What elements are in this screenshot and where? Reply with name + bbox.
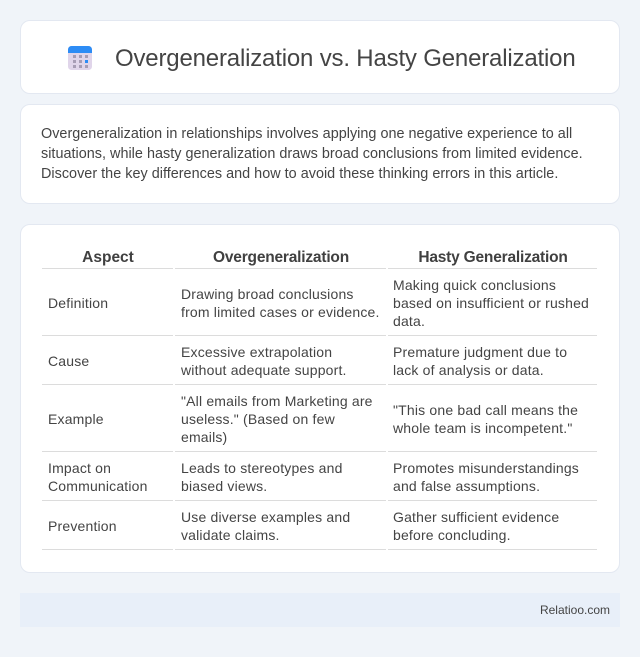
table row: Impact on Communication: and false assumptions. <box>393 478 540 494</box>
table row: Example: useless." (Based on few <box>181 411 335 427</box>
panel: comparison table card <box>20 224 620 573</box>
table row: Definition: Drawing broad conclusions <box>181 286 354 302</box>
text block: introduction: Discover the key differences and how to avoid these thinking errors in this article. <box>41 166 558 182</box>
table row: Example: emails) <box>181 429 227 445</box>
table row: Impact on Communication <box>42 460 597 501</box>
table row: Cause: Cause <box>48 353 89 369</box>
table header row <box>42 249 597 269</box>
table row: Prevention: before concluding. <box>393 527 511 543</box>
icon: calendar <box>68 46 92 70</box>
table row: Impact on Communication: biased views. <box>181 478 267 494</box>
panel: introduction card <box>20 104 620 204</box>
footer text: Relatioo.com <box>540 603 610 617</box>
table row: Prevention: validate claims. <box>181 527 280 543</box>
text block: introduction: situations, while hasty generalization draws broad conclusions from limited evidence. <box>41 146 583 162</box>
table row: Prevention: Use diverse examples and <box>181 509 350 525</box>
table row: Definition: based on insufficient or rushed <box>393 295 589 311</box>
table row: Impact on Communication: Promotes misunderstandings <box>393 460 579 476</box>
panel: title card <box>20 20 620 94</box>
table row: Example: whole team is incompetent." <box>393 420 572 436</box>
table header row: Overgeneralization <box>213 249 349 266</box>
table row: Example: "All emails from Marketing are <box>181 393 373 409</box>
table row: Cause: lack of analysis or data. <box>393 362 544 378</box>
table row: Prevention: Prevention <box>48 518 117 534</box>
table row: Prevention <box>42 509 597 550</box>
table row: Impact on Communication: Impact on <box>48 460 111 476</box>
text block: introduction: Overgeneralization in relationships involves applying one negative experience to all <box>41 126 572 142</box>
footer bar <box>20 593 620 627</box>
table row: Example: Example <box>48 411 104 427</box>
table row: Cause: Excessive extrapolation <box>181 344 332 360</box>
table row: Definition: data. <box>393 313 425 329</box>
table row: Cause: without adequate support. <box>181 362 347 378</box>
table row: Impact on Communication: Communication <box>48 478 148 494</box>
table row: Cause <box>42 344 597 385</box>
table header row: Hasty Generalization <box>418 249 568 266</box>
table row: Definition: Definition <box>48 295 108 311</box>
table row: Example <box>42 393 597 452</box>
table row: Prevention: Gather sufficient evidence <box>393 509 559 525</box>
table row: Definition: Making quick conclusions <box>393 277 556 293</box>
table row: Impact on Communication: Leads to stereotypes and <box>181 460 343 476</box>
table row: Definition <box>42 277 597 336</box>
table header row: Aspect <box>82 249 134 266</box>
table row: Cause: Premature judgment due to <box>393 344 567 360</box>
title: Overgeneralization vs. Hasty Generalization <box>115 45 575 72</box>
text block: introduction <box>41 126 583 182</box>
table row: Definition: from limited cases or evidence. <box>181 304 380 320</box>
table row: Example: "This one bad call means the <box>393 402 578 418</box>
